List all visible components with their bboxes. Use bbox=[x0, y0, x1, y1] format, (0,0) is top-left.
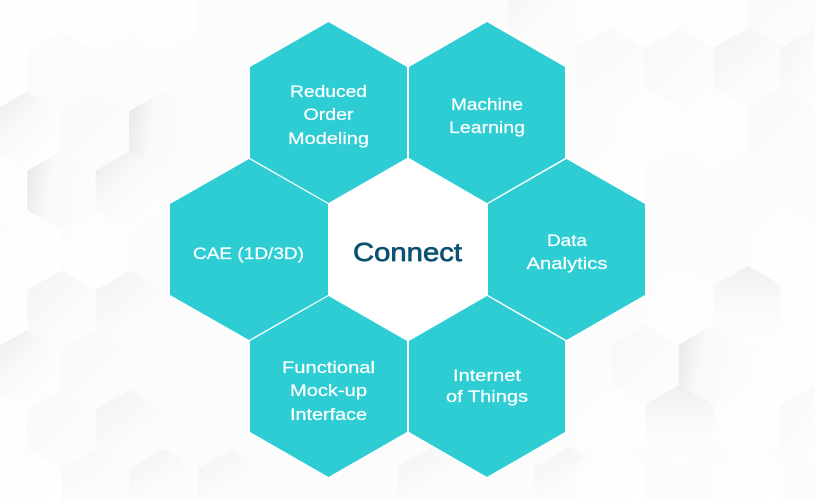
hexagon: Functional Mock-up Interface: Mock-up bbox=[290, 381, 367, 400]
hexagon: Internet of Things: Internet bbox=[453, 366, 521, 385]
hexagon: CAE (1D/3D) bbox=[170, 159, 328, 340]
hexagon: Machine Learning: Learning bbox=[449, 118, 525, 137]
hexagon: Reduced Order Modeling: Reduced bbox=[290, 82, 367, 101]
hexagon: Data Analytics: Data bbox=[547, 231, 588, 250]
hexagon: Internet of Things bbox=[409, 296, 565, 477]
hexagon: Machine Learning: Machine bbox=[451, 95, 523, 114]
hexagon: Reduced Order Modeling bbox=[250, 22, 407, 203]
hexagon: Data Analytics bbox=[488, 159, 645, 340]
hexagon: Functional Mock-up Interface: Interface bbox=[290, 405, 367, 424]
hexagon: Reduced Order Modeling: Order bbox=[304, 105, 354, 124]
hexagon: Internet of Things: of Things bbox=[446, 387, 528, 406]
hexagon: CAE (1D/3D): CAE (1D/3D) bbox=[193, 244, 304, 263]
hexagon: Machine Learning bbox=[409, 22, 565, 203]
hexagon cluster bbox=[168, 20, 647, 479]
hexagon: Data Analytics: Analytics bbox=[526, 254, 608, 273]
center hexagon: Connect bbox=[329, 160, 487, 340]
hexagon: Functional Mock-up Interface bbox=[250, 296, 407, 477]
center hexagon: Connect: Connect bbox=[353, 237, 463, 267]
hexagon: Functional Mock-up Interface: Functional bbox=[282, 358, 375, 377]
hexagon: Reduced Order Modeling: Modeling bbox=[288, 129, 369, 148]
white halo behind cluster bbox=[168, 20, 647, 479]
